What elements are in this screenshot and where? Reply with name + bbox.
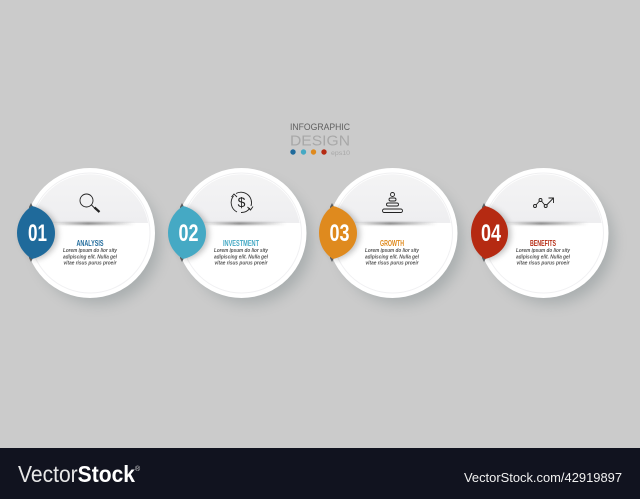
- title: DESIGN: [290, 134, 350, 150]
- text block: Lorem ipsum do lior sity: [365, 248, 420, 254]
- heading: BENEFITS: [530, 239, 556, 248]
- text block: [365, 248, 420, 266]
- text block: Lorem ipsum do lior sity: [214, 248, 269, 254]
- text block: adipiscing elit. Nulla gel: [516, 254, 570, 260]
- icon: dollar cycle: [231, 192, 253, 213]
- footer bar: [0, 448, 640, 499]
- registered mark: ®: [135, 465, 141, 473]
- icon: magnifier: [80, 194, 100, 212]
- text block: vitae risus purus proeir: [64, 260, 117, 266]
- badge: [471, 203, 511, 262]
- footer id: VectorStock.com/42919897: [464, 471, 622, 485]
- heading: INVESTMENT: [223, 239, 259, 248]
- text block: adipiscing elit. Nulla gel: [63, 254, 117, 260]
- icon: trend line: [534, 198, 554, 208]
- icon: stacked stones: [382, 192, 402, 212]
- panel: 01 analysis: [17, 168, 160, 304]
- text block: Lorem ipsum do lior sity: [516, 248, 571, 254]
- icon: dollar cycle: $: [238, 194, 246, 210]
- text block: vitae risus purus proeir: [366, 260, 419, 266]
- title: eps10: [331, 150, 350, 157]
- text block: Lorem ipsum do lior sity: [63, 248, 118, 254]
- text block: [214, 248, 269, 266]
- text block: [516, 248, 571, 266]
- heading: GROWTH: [380, 239, 404, 248]
- title: [290, 122, 350, 157]
- heading: ANALYSIS: [76, 239, 104, 248]
- footer logo: VectorStock: [18, 461, 136, 487]
- text block: [63, 248, 118, 266]
- title: INFOGRAPHIC: [290, 122, 350, 132]
- badge: [17, 203, 58, 262]
- badge: [319, 203, 360, 262]
- text block: vitae risus purus proeir: [516, 260, 570, 266]
- badge: 04: [481, 220, 501, 247]
- badge: 03: [330, 220, 350, 247]
- panel: 04 benefits: [471, 168, 614, 304]
- badge: [168, 203, 209, 262]
- text block: adipiscing elit. Nulla gel: [214, 254, 268, 260]
- badge: 01: [28, 220, 47, 247]
- panel: 02 investment: [168, 168, 312, 304]
- text block: vitae risus purus proeir: [214, 260, 268, 266]
- text block: adipiscing elit. Nulla gel: [365, 254, 419, 260]
- panel: 03 growth: [319, 168, 462, 304]
- badge: 02: [178, 220, 198, 247]
